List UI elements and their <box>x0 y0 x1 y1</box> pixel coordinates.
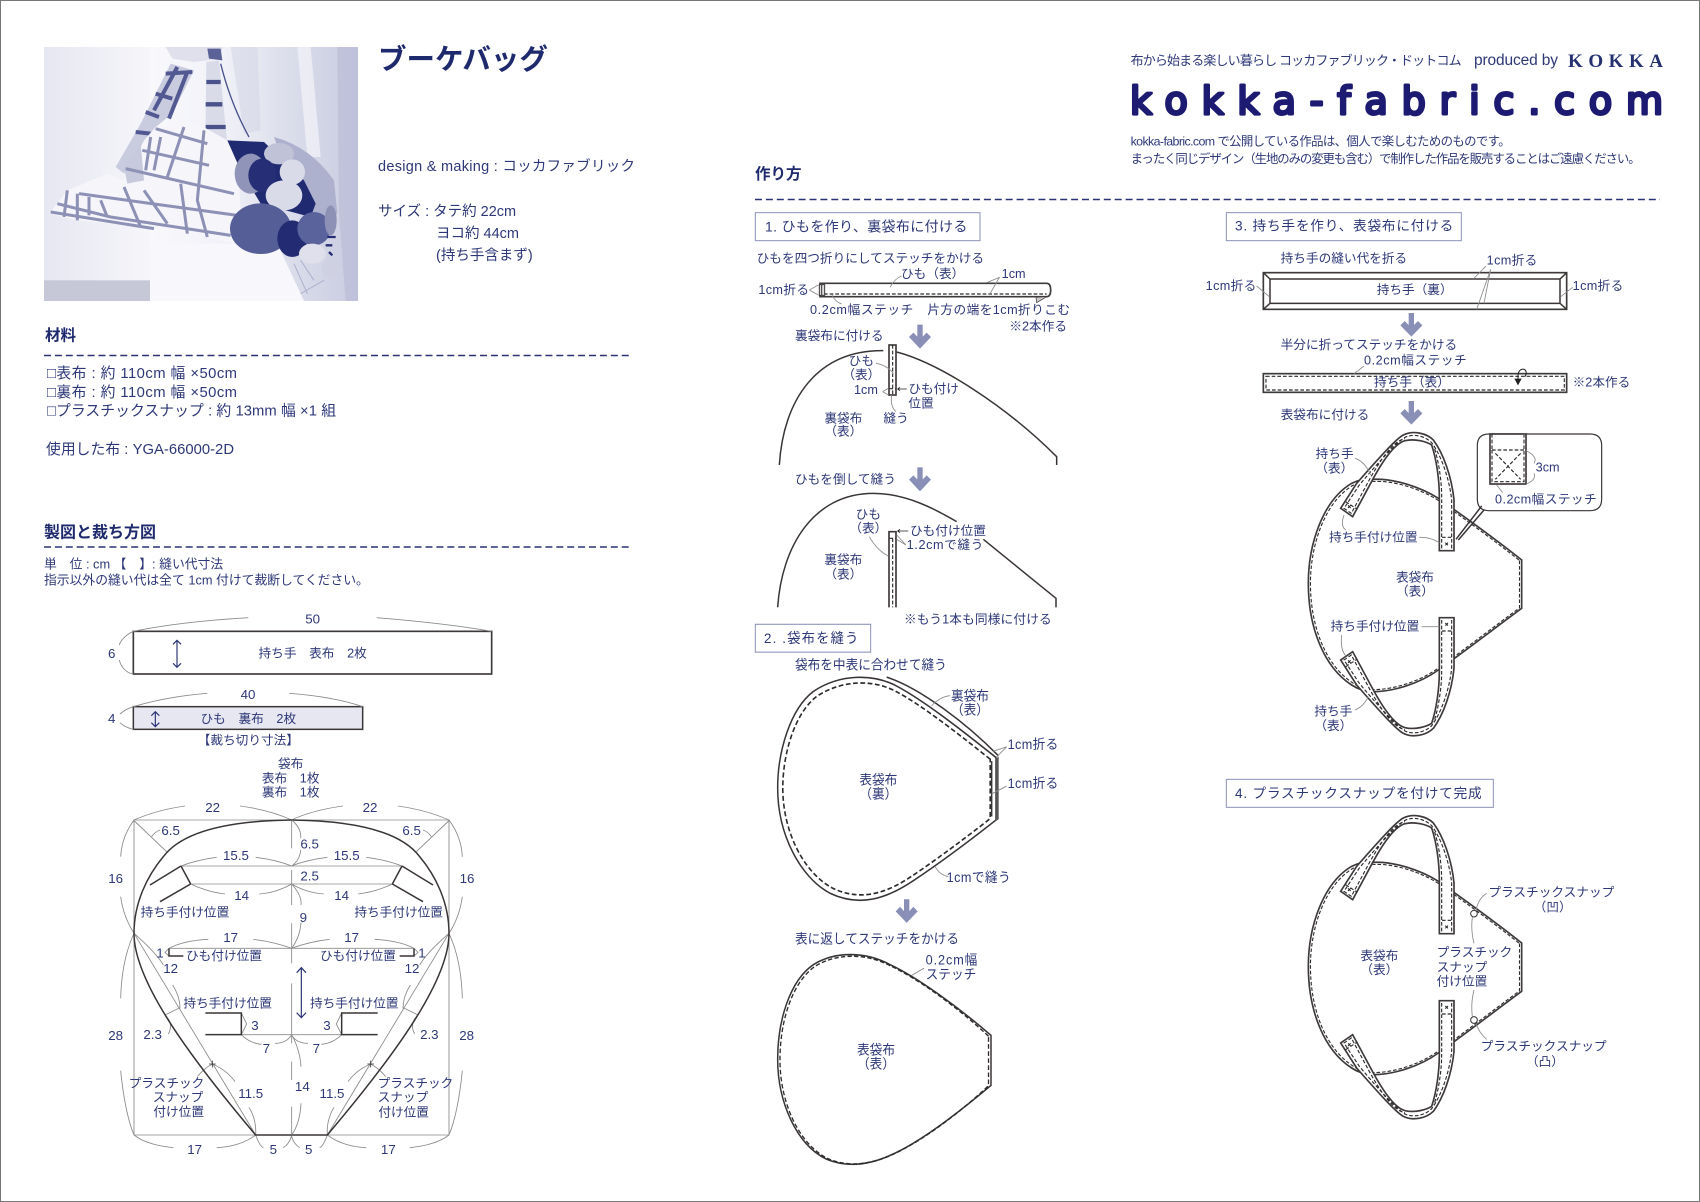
materials list <box>46 365 336 458</box>
pattern: straps <box>108 611 492 800</box>
usage notice <box>1131 134 1641 166</box>
snap labels: プラスチックスナップ <box>1488 886 1615 900</box>
snap labels: 表袋布 <box>1360 949 1398 963</box>
callout <box>1456 434 1602 540</box>
cord drawing: 片方の端を1cm折りこむ <box>927 302 1070 317</box>
arrow <box>1400 401 1422 425</box>
stitched handle: 持ち手（表） <box>1374 376 1450 390</box>
brand tagline <box>1131 52 1558 69</box>
bag labels: 持ち手 <box>1314 705 1353 719</box>
position labels: スナップ <box>153 1090 204 1104</box>
inner bag with cord folded: ひも <box>856 507 881 521</box>
folded handle: 1cm折る <box>1487 254 1537 268</box>
dimension numbers: 17 <box>381 1142 396 1157</box>
sewn bag inside out: （表） <box>951 702 989 718</box>
materials list: 使用した布 : YGA-66000-2D <box>46 441 234 458</box>
step 1 heading box <box>755 213 980 241</box>
sewn bag inside out: 1cmで縫う <box>947 869 1011 885</box>
position labels: 付け位置 <box>378 1106 429 1120</box>
handle piece <box>108 611 492 674</box>
stitched handle <box>1263 366 1630 392</box>
dimension numbers: 2.5 <box>300 869 319 884</box>
dimension numbers: 16 <box>108 871 123 886</box>
heading: how to make: 作り方 <box>755 164 802 183</box>
dimension numbers: 16 <box>460 871 474 886</box>
dimension numbers: 6.5 <box>300 837 319 852</box>
dimension numbers: 2.3 <box>143 1027 162 1042</box>
callout: 3cm <box>1536 460 1560 474</box>
bag turned right side out: 表袋布 <box>857 1042 895 1057</box>
dimension numbers: 7 <box>263 1041 270 1056</box>
position labels <box>129 906 453 1120</box>
materials list: □表布 : 約 110cm 幅 ×50cm <box>47 365 237 382</box>
pattern note: 指示以外の縫い代は全て 1cm 付けて裁断してください。 <box>44 572 369 588</box>
snap labels: （表） <box>1360 963 1398 977</box>
usage notice: まったく同じデザイン（生地のみの変更も含む）で制作した作品を販売することはご遠慮ください。 <box>1131 151 1641 166</box>
cord drawing: 0.2cm幅ステッチ <box>810 303 913 317</box>
bag labels: 持ち手付け位置 <box>1329 530 1418 544</box>
arrow <box>1400 313 1422 337</box>
step 3 top: 0.2cm幅ステッチ <box>1364 353 1467 367</box>
dimension numbers: 12 <box>405 961 419 976</box>
position labels: 持ち手付け位置 <box>141 906 230 920</box>
bag turned right side out: 0.2cm幅 <box>926 952 977 967</box>
size info: サイズ : タテ約 22cm <box>378 203 516 220</box>
folded handle: 持ち手（裏） <box>1377 283 1453 297</box>
heading: pattern and cutting: 製図と裁ち方図 <box>44 522 156 542</box>
step 2: 表に返してステッチをかける <box>795 931 959 947</box>
bag piece label <box>262 757 320 800</box>
snap labels: スナップ <box>1437 960 1488 974</box>
sewn bag inside out: 裏袋布 <box>951 688 989 703</box>
dimension numbers: 17 <box>344 930 359 945</box>
cord piece: 40 <box>241 687 255 702</box>
cord drawing: 1cm折る <box>758 283 809 297</box>
step 2 heading box <box>755 624 871 652</box>
dimension numbers: 9 <box>300 910 307 925</box>
callout: 0.2cm幅ステッチ <box>1495 492 1597 506</box>
cord piece: 4 <box>108 711 116 726</box>
position labels: ひも付け位置 <box>320 949 396 963</box>
dimension numbers: 7 <box>313 1041 320 1056</box>
bag labels: （表） <box>1314 719 1352 733</box>
step 2 heading box: 2. .袋布を縫う <box>764 630 858 646</box>
inner bag with cord <box>779 345 1057 465</box>
cord piece <box>108 687 363 748</box>
snap labels: プラスチックスナップ <box>1481 1040 1607 1054</box>
cord piece: 【裁ち切り寸法】 <box>198 733 299 748</box>
arrow <box>909 325 931 349</box>
step 3 top: 持ち手の縫い代を折る <box>1281 252 1407 266</box>
dimension numbers: 22 <box>205 800 220 815</box>
dimension numbers: 17 <box>223 930 238 945</box>
bag turned right side out: （表） <box>857 1056 895 1072</box>
dimension numbers: 15.5 <box>223 848 249 863</box>
bag piece label: 表布 1枚 <box>262 771 320 785</box>
design credit: design & making : コッカファブリック <box>378 157 635 175</box>
inner bag with cord: （表） <box>824 425 862 439</box>
photo: bouquet bag <box>44 47 358 301</box>
handle piece: 持ち手 表布 2枚 <box>259 646 367 660</box>
inner bag with cord folded: ひも付け位置 <box>910 524 986 538</box>
step 3 top: 半分に折ってステッチをかける <box>1281 338 1457 352</box>
cord drawing: 1cm <box>1002 267 1026 281</box>
position labels: ひも付け位置 <box>186 949 262 963</box>
logo: kokka-fabric.com <box>1130 79 1663 123</box>
bag labels <box>1314 447 1434 733</box>
inner bag with cord folded: 1.2cmで縫う <box>907 538 983 552</box>
inner bag with cord: ひも付け <box>908 382 959 396</box>
title: ブーケバッグ <box>378 43 548 76</box>
inner bag with cord: ひも <box>849 354 874 368</box>
snaps <box>1471 893 1487 1039</box>
inner bag with cord: 位置 <box>908 396 934 410</box>
folded handle <box>1206 254 1623 309</box>
step 1 heading box: 1. ひもを作り、裏袋布に付ける <box>765 219 967 235</box>
position labels: 持ち手付け位置 <box>310 996 399 1010</box>
brand tagline: 布から始まる楽しい暮らし コッカファブリック・ドットコム <box>1131 53 1462 68</box>
usage notice: kokka-fabric.com で公開している作品は、個人で楽しむためのものです。 <box>1131 134 1511 148</box>
dimension numbers: 14 <box>334 888 350 903</box>
pattern note: 単 位 : cm 【 】: 縫い代寸法 <box>44 556 223 572</box>
dimension numbers: 15.5 <box>334 848 360 863</box>
inner bag with cord folded: 裏袋布 <box>824 553 862 567</box>
bag piece label: 袋布 <box>278 757 303 771</box>
step 3 heading box: 3. 持ち手を作り、表袋布に付ける <box>1235 218 1453 233</box>
size info <box>378 203 533 264</box>
bag turned right side out <box>778 952 991 1164</box>
dimension numbers: 1 <box>418 945 426 960</box>
step 2 <box>755 624 1058 1164</box>
leader lines <box>1341 458 1439 710</box>
step 1: 裏袋布に付ける <box>795 329 884 343</box>
step 2: 袋布を中表に合わせて縫う <box>795 657 947 672</box>
inner bag with cord: 縫う <box>883 411 909 425</box>
dimension numbers: 1 <box>156 945 164 960</box>
folded handle: 1cm折る <box>1206 279 1256 293</box>
dimension numbers: 6.5 <box>402 823 421 838</box>
dimension numbers: 2.3 <box>420 1027 439 1042</box>
bag labels: （表） <box>1315 462 1353 476</box>
dimension numbers: 6.5 <box>161 823 180 838</box>
position labels: スナップ <box>378 1090 429 1104</box>
bag labels: 表袋布 <box>1396 571 1434 585</box>
bag turned right side out: ステッチ <box>926 967 976 982</box>
pattern: bag body <box>108 800 474 1157</box>
stitched handle: ※2本作る <box>1573 376 1630 390</box>
dimension numbers: 22 <box>363 800 377 815</box>
materials list: □プラスチックスナップ : 約 13mm 幅 ×1 組 <box>47 402 336 420</box>
size info: ヨコ約 44cm <box>436 225 519 242</box>
dimension numbers: 3 <box>251 1018 259 1033</box>
snap labels: （凹） <box>1534 900 1572 914</box>
finished bag <box>1308 816 1522 1119</box>
dimension numbers: 5 <box>305 1142 312 1157</box>
snap labels: 付け位置 <box>1437 975 1488 989</box>
dimension numbers: 14 <box>234 888 250 903</box>
dimension numbers: 3 <box>323 1018 331 1033</box>
step 4 heading box: 4. プラスチックスナップを付けて完成 <box>1235 786 1482 801</box>
inner bag with cord folded: （表） <box>849 521 887 535</box>
heading: materials: 材料 <box>45 326 77 344</box>
dimension numbers: 28 <box>459 1028 474 1043</box>
step 3 bag <box>1308 433 1602 736</box>
sewn bag inside out <box>778 677 1058 900</box>
position labels: 持ち手付け位置 <box>183 996 272 1010</box>
bag labels: 持ち手付け位置 <box>1331 620 1420 634</box>
pattern note <box>44 556 369 588</box>
dimension numbers: 5 <box>270 1142 277 1157</box>
dimension numbers: 14 <box>295 1079 310 1094</box>
step 3 top <box>1206 213 1630 425</box>
position labels: プラスチック <box>129 1076 204 1090</box>
dimension numbers <box>108 800 474 1157</box>
dimension numbers: 11.5 <box>320 1086 344 1101</box>
cord drawing <box>758 267 1070 334</box>
step 1: ※もう1本も同様に付ける <box>904 612 1052 626</box>
bag piece label: 裏布 1枚 <box>262 786 320 800</box>
dimension numbers: 11.5 <box>238 1086 263 1101</box>
step 3 top: 表袋布に付ける <box>1281 408 1369 422</box>
cord drawing: ひも（表） <box>901 267 964 281</box>
sewn bag inside out: （裏） <box>859 786 897 802</box>
arrow <box>896 899 918 923</box>
cord piece: ひも 裏布 2枚 <box>201 712 296 726</box>
dimension numbers: 28 <box>108 1028 123 1043</box>
position labels: プラスチック <box>378 1076 453 1090</box>
step 1: ひもを倒して縫う <box>795 472 896 486</box>
KOKKA wordmark: KOKKA <box>1568 51 1663 72</box>
snap labels: プラスチック <box>1437 945 1512 959</box>
step 4 <box>1226 779 1615 1119</box>
handle piece: 50 <box>305 611 320 626</box>
position labels: 持ち手付け位置 <box>354 906 443 920</box>
snap labels <box>1360 886 1615 1069</box>
handle piece: 6 <box>108 646 115 661</box>
sewn bag inside out: 1cm折る <box>1008 737 1058 752</box>
step 4 heading box <box>1226 779 1493 807</box>
step 1: ひもを四つ折りにしてステッチをかける <box>757 252 984 266</box>
inner bag with cord: （表） <box>842 368 880 382</box>
bag labels: （表） <box>1396 585 1434 599</box>
step 1 <box>755 213 1070 626</box>
dimension numbers: 12 <box>163 961 178 976</box>
materials list: □裏布 : 約 110cm 幅 ×50cm <box>47 384 237 401</box>
position labels: 付け位置 <box>153 1105 204 1119</box>
sewn bag inside out: 1cm折る <box>1008 776 1058 791</box>
cord drawing: ※2本作る <box>1009 320 1067 334</box>
inner bag with cord folded <box>778 493 1056 607</box>
folded handle: 1cm折る <box>1573 279 1623 293</box>
sewn bag inside out: 表袋布 <box>859 772 897 787</box>
inner bag with cord folded: （表） <box>824 568 862 582</box>
size info: (持ち手含まず) <box>436 247 533 264</box>
dimension numbers: 17 <box>187 1142 202 1157</box>
step 3 heading box <box>1226 213 1461 241</box>
inner bag with cord: 1cm <box>854 383 878 397</box>
bag labels: 持ち手 <box>1316 447 1354 461</box>
inner bag with cord: 裏袋布 <box>824 411 862 425</box>
snap labels: （凸） <box>1526 1055 1564 1069</box>
arrow <box>909 467 931 491</box>
brand tagline: produced by <box>1474 52 1558 69</box>
